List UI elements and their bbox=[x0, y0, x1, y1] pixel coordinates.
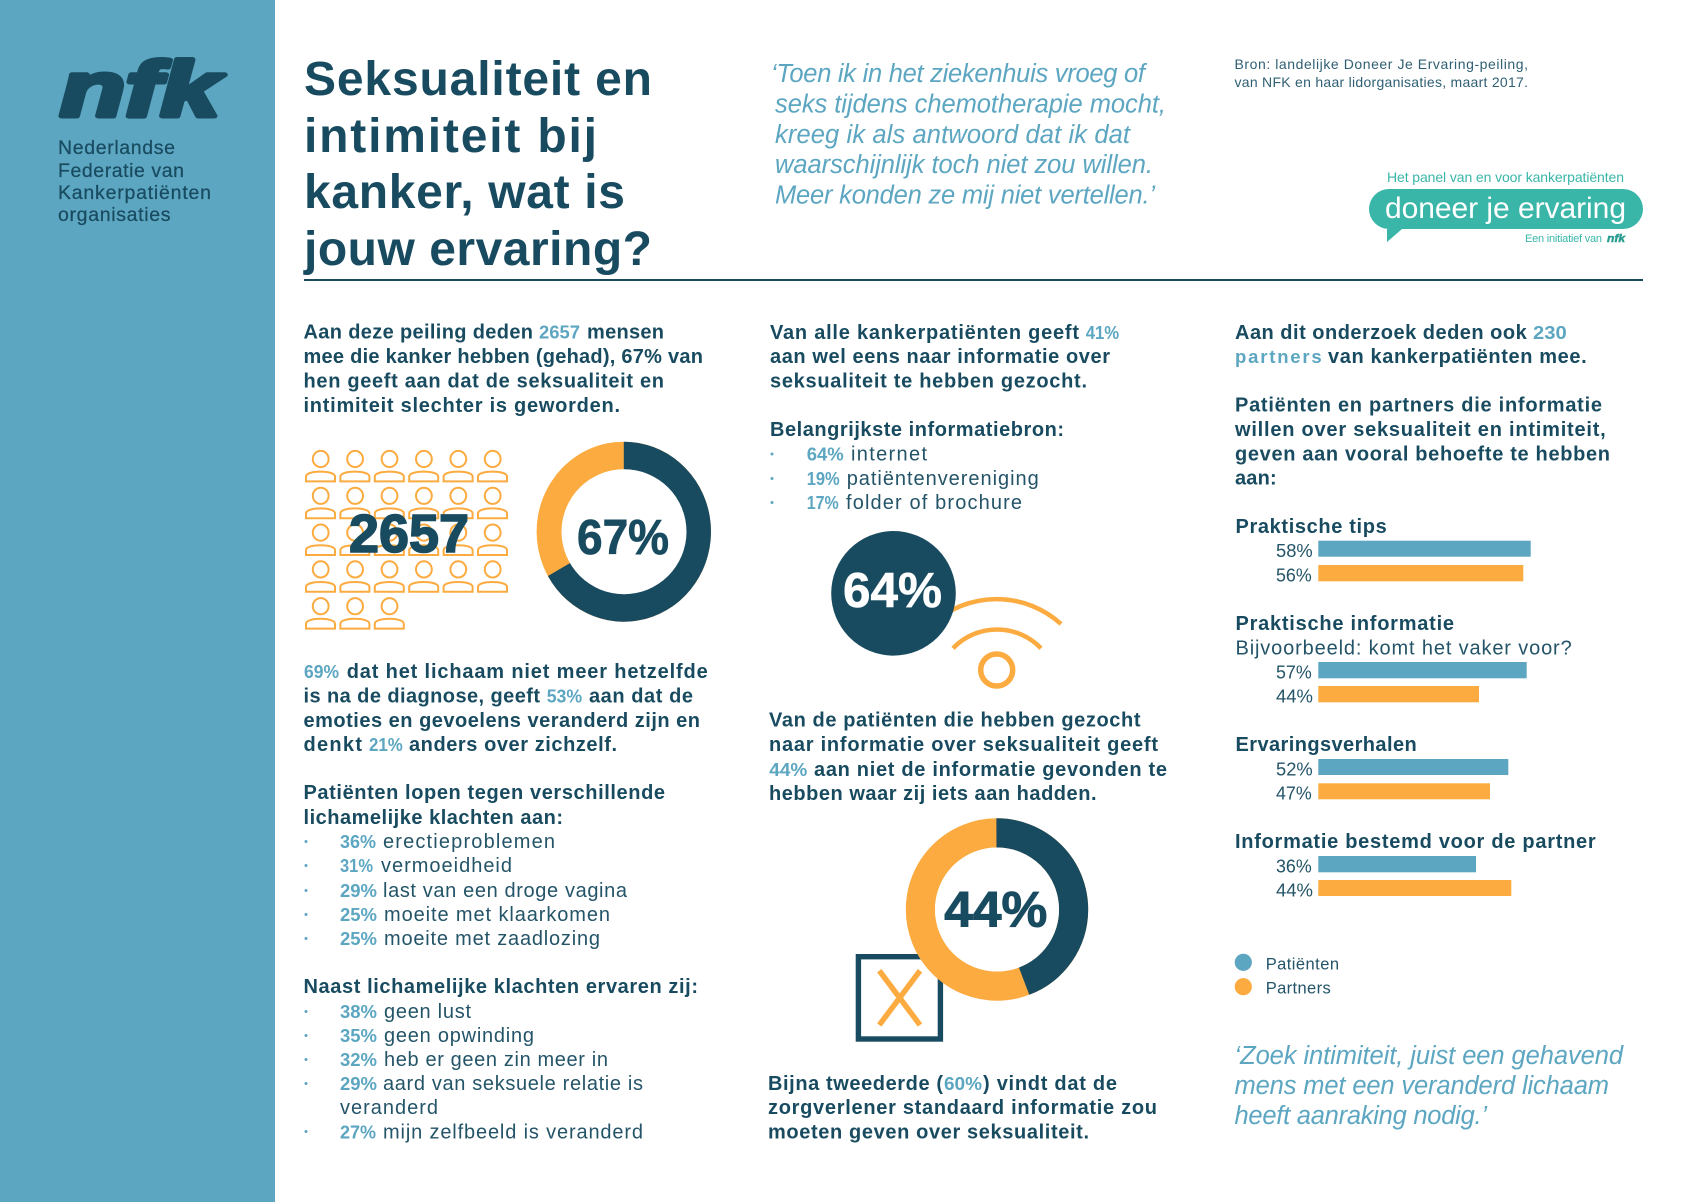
legend: Partners bbox=[1266, 980, 1331, 998]
bar group: Ervaringsverhalen: 47% bbox=[1276, 783, 1312, 804]
list: other complaints: Naast lichamelijke klachten ervaren zij: bbox=[304, 976, 698, 998]
quote: bottom: ‘Zoek intimiteit, juist een gehavend bbox=[1234, 1042, 1624, 1070]
list: physical complaints: 36% bbox=[340, 831, 376, 852]
text: information search: 41% bbox=[1086, 322, 1119, 343]
list: other complaints: geen opwinding bbox=[384, 1025, 534, 1047]
text: standard information bbox=[768, 1073, 1157, 1144]
organisation name: organisaties bbox=[58, 204, 171, 226]
text: not found: aan niet de informatie gevonden te bbox=[814, 759, 1167, 781]
text: intro: hen geeft aan dat de seksualiteit en bbox=[304, 370, 664, 392]
bar group: Praktische tips: 58% bbox=[1276, 540, 1313, 561]
text: not found: 44% bbox=[769, 759, 807, 780]
donut chart: 44% bbox=[920, 833, 1074, 986]
text: intro: 2657 bbox=[539, 322, 580, 342]
source note: Bron: landelijke Doneer Je Ervaring-peiling, bbox=[1234, 56, 1528, 72]
text: not found: naar informatie over seksualiteit geeft bbox=[769, 734, 1158, 756]
text: intro: mee die kanker hebben (gehad), 67% van bbox=[304, 346, 703, 368]
quote: bottom bbox=[1234, 1042, 1624, 1130]
list: information sources: patiëntenvereniging bbox=[847, 468, 1039, 490]
list: physical complaints: erectieproblemen bbox=[383, 831, 555, 853]
text: information search: Van alle kankerpatiënten geeft bbox=[770, 322, 1079, 344]
list: physical complaints: vermoeidheid bbox=[381, 855, 512, 877]
icon: wifi with 64%: 64% bbox=[843, 564, 942, 618]
text: needs: willen over seksualiteit en intimiteit, bbox=[1234, 419, 1606, 441]
text: body and emotions: 69% bbox=[304, 661, 339, 682]
text: needs bbox=[1234, 395, 1610, 489]
panel: column 1 bbox=[304, 322, 711, 1144]
text: body and emotions: 21% bbox=[369, 734, 403, 755]
bar group: Ervaringsverhalen: 52% bbox=[1276, 758, 1313, 779]
panel: column 2 bbox=[768, 322, 1167, 1144]
text: body and emotions: aan dat de bbox=[589, 686, 693, 708]
bar group: Praktische tips: 56% bbox=[1276, 565, 1312, 586]
quote: top bbox=[771, 60, 1166, 210]
list: other complaints: 27% bbox=[340, 1122, 376, 1142]
text: partners intro: partners bbox=[1235, 346, 1322, 367]
text: body and emotions: emoties en gevoelens veranderd zijn en bbox=[304, 710, 700, 732]
icon: checkbox with cross bbox=[858, 957, 940, 1039]
text: partners intro: 230 bbox=[1533, 322, 1567, 343]
list: other complaints: 32% bbox=[340, 1049, 377, 1070]
organisation name: Kankerpatiënten bbox=[58, 182, 211, 204]
icon grid: people bbox=[306, 451, 507, 629]
list: physical complaints: 25% bbox=[340, 928, 377, 949]
bar group: Informatie bestemd voor de partner: 44% bbox=[1276, 880, 1313, 901]
text: standard information: zorgverlener standaard informatie zou bbox=[768, 1097, 1157, 1119]
text: standard information: moeten geven over seksualiteit. bbox=[768, 1122, 1089, 1144]
logo: doneer je ervaring: nfk bbox=[1607, 233, 1626, 245]
list: other complaints: 35% bbox=[340, 1025, 377, 1046]
logo: doneer je ervaring: Het panel van en voor kankerpatiënten bbox=[1387, 169, 1624, 185]
bar group: Praktische tips bbox=[1236, 516, 1531, 586]
text: body and emotions: dat het lichaam niet meer hetzelfde bbox=[347, 661, 708, 683]
text: standard information: ) vindt dat de bbox=[983, 1073, 1117, 1095]
text: partners intro: Aan dit onderzoek deden ook bbox=[1235, 322, 1528, 344]
text: needs: Patiënten en partners die informatie bbox=[1235, 395, 1602, 417]
list: information sources: folder of brochure bbox=[846, 492, 1022, 514]
list: information sources: internet bbox=[851, 444, 927, 466]
title bbox=[303, 53, 652, 276]
source note bbox=[1234, 56, 1528, 90]
list: physical complaints: 29% bbox=[340, 880, 377, 901]
quote: top: kreeg ik als antwoord dat ik dat bbox=[775, 121, 1131, 149]
text: standard information: Bijna tweederde ( bbox=[768, 1073, 943, 1095]
donut chart: 67% bbox=[537, 442, 711, 622]
list: physical complaints bbox=[304, 782, 665, 950]
bar group: Praktische tips: Praktische tips bbox=[1236, 516, 1387, 538]
list: physical complaints: moeite met zaadlozing bbox=[384, 928, 600, 950]
list: other complaints: geen lust bbox=[384, 1001, 471, 1023]
list: other complaints: aard van seksuele relatie is bbox=[383, 1073, 643, 1095]
list: physical complaints: moeite met klaarkomen bbox=[384, 904, 610, 926]
text: body and emotions: is na de diagnose, geeft bbox=[304, 686, 540, 708]
number: 2657: 2657 bbox=[349, 504, 469, 564]
title: jouw ervaring? bbox=[303, 223, 652, 276]
organisation name bbox=[58, 137, 211, 226]
organisation name: Federatie van bbox=[58, 160, 184, 182]
text: standard information: 60% bbox=[944, 1073, 982, 1094]
list: other complaints: 38% bbox=[340, 1001, 377, 1022]
panel: column 3 bbox=[1234, 322, 1624, 1130]
list: other complaints bbox=[304, 976, 698, 1144]
text: body and emotions: denkt bbox=[304, 734, 362, 756]
text: needs: aan: bbox=[1235, 467, 1277, 489]
bar group: Informatie bestemd voor de partner: Informatie bestemd voor de partner bbox=[1235, 831, 1596, 853]
donut chart: 44%: 44% bbox=[944, 882, 1047, 938]
bar group: Praktische informatie: Bijvoorbeeld: komt het vaker voor? bbox=[1236, 637, 1572, 659]
logo: doneer je ervaring bbox=[1369, 169, 1643, 245]
text: intro: mensen bbox=[587, 322, 664, 344]
logo: doneer je ervaring: doneer je ervaring bbox=[1385, 192, 1626, 225]
legend bbox=[1235, 954, 1339, 998]
text: not found: hebben waar zij iets aan hadden. bbox=[769, 783, 1096, 805]
quote: bottom: mens met een veranderd lichaam bbox=[1234, 1072, 1609, 1100]
text: information search: aan wel eens naar informatie over bbox=[770, 346, 1110, 368]
text: intro: Aan deze peiling deden bbox=[304, 322, 533, 344]
text: body and emotions bbox=[304, 661, 708, 756]
panel: sidebar bbox=[0, 0, 275, 1202]
bar group: Praktische informatie bbox=[1236, 613, 1572, 707]
bar group: Informatie bestemd voor de partner bbox=[1235, 831, 1596, 901]
bar group: Praktische informatie: 57% bbox=[1276, 661, 1312, 682]
text: needs: geven aan vooral behoefte te hebben bbox=[1235, 444, 1610, 466]
text: body and emotions: anders over zichzelf. bbox=[409, 734, 617, 756]
list: information sources: Belangrijkste informatiebron: bbox=[770, 419, 1064, 441]
bar group: Ervaringsverhalen bbox=[1236, 734, 1508, 804]
quote: bottom: heeft aanraking nodig.’ bbox=[1234, 1102, 1487, 1130]
text: partners intro: van kankerpatiënten mee. bbox=[1328, 346, 1587, 368]
list: information sources: 19% bbox=[807, 468, 840, 489]
text: not found: Van de patiënten die hebben gezocht bbox=[769, 710, 1141, 732]
list: other complaints: veranderd bbox=[340, 1097, 438, 1119]
list: other complaints: 29% bbox=[340, 1073, 377, 1094]
list: other complaints: mijn zelfbeeld is veranderd bbox=[383, 1122, 643, 1144]
text: not found bbox=[769, 710, 1167, 805]
list: information sources: 64% bbox=[807, 444, 844, 464]
list: information sources bbox=[770, 419, 1064, 514]
quote: top: seks tijdens chemotherapie mocht, bbox=[775, 90, 1166, 118]
text: body and emotions: 53% bbox=[547, 686, 582, 707]
list: physical complaints: lichamelijke klachten aan: bbox=[304, 807, 563, 829]
logo: doneer je ervaring: Een initiatief van bbox=[1525, 233, 1602, 245]
list: physical complaints: 31% bbox=[340, 855, 373, 876]
icon: wifi with 64% bbox=[831, 531, 1061, 686]
list: physical complaints: last van een droge vagina bbox=[383, 880, 628, 902]
title: kanker, wat is bbox=[304, 166, 625, 219]
quote: top: Meer konden ze mij niet vertellen.’ bbox=[775, 182, 1155, 210]
logo: nfk: nfk bbox=[60, 45, 225, 133]
organisation name: Nederlandse bbox=[58, 137, 175, 159]
bar group: Informatie bestemd voor de partner: 36% bbox=[1276, 855, 1312, 876]
text: information search: seksualiteit te hebben gezocht. bbox=[770, 370, 1087, 392]
legend: Patiënten bbox=[1266, 955, 1339, 973]
title: Seksualiteit en bbox=[304, 53, 652, 106]
title: intimiteit bij bbox=[304, 110, 597, 163]
donut chart: 67%: 67% bbox=[577, 511, 669, 565]
text: intro: intimiteit slechter is geworden. bbox=[304, 395, 620, 417]
source note: van NFK en haar lidorganisaties, maart 2017. bbox=[1234, 74, 1528, 90]
text: partners intro bbox=[1235, 322, 1587, 368]
list: physical complaints: 25% bbox=[340, 904, 377, 925]
list: physical complaints: Patiënten lopen tegen verschillende bbox=[304, 782, 665, 804]
list: other complaints: heb er geen zin meer in bbox=[384, 1049, 608, 1071]
bar group: Ervaringsverhalen: Ervaringsverhalen bbox=[1236, 734, 1417, 756]
text: information search bbox=[770, 322, 1119, 392]
quote: top: waarschijnlijk toch niet zou willen. bbox=[775, 151, 1153, 179]
bar group: Praktische informatie: 44% bbox=[1276, 686, 1313, 707]
quote: top: ‘Toen ik in het ziekenhuis vroeg of bbox=[771, 60, 1148, 88]
list: information sources: 17% bbox=[807, 492, 839, 513]
bar group: Praktische informatie: Praktische informatie bbox=[1236, 613, 1454, 635]
text: intro bbox=[304, 322, 703, 417]
